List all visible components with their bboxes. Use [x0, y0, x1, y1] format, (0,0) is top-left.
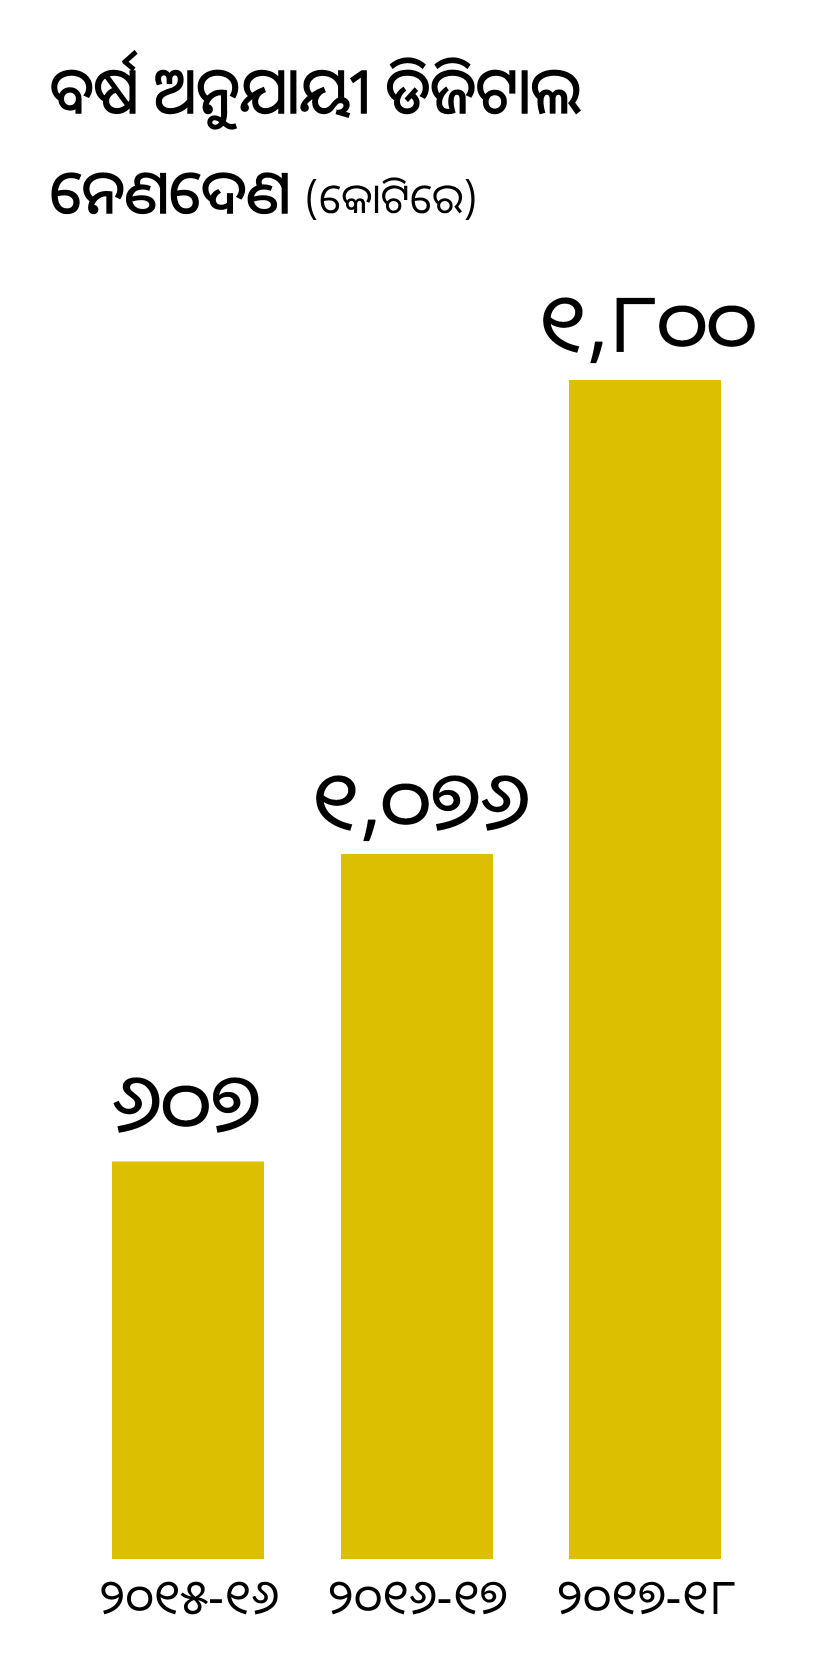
- bar: 2017-18: [537, 264, 757, 1629]
- value 1,076: ୧,୦୭୬: [310, 742, 530, 854]
- bar: 2015-16: [98, 1044, 279, 1629]
- title line 2 with unit: ନେଣଦେଣ (କୋଟିରେ): [50, 149, 478, 231]
- value 607: ୬୦୭: [112, 1044, 260, 1156]
- year label 2015-16: ୨୦୧୫-୧୬: [98, 1563, 279, 1629]
- year label 2016-17: ୨୦୧୬-୧୭: [327, 1563, 507, 1629]
- title: [50, 45, 581, 231]
- title line 1: ବର୍ଷ ଅନୁଯାୟୀ ଡିଜିଟାଲ: [50, 45, 581, 132]
- bar: 2016-17: [310, 742, 530, 1629]
- year label 2017-18: ୨୦୧୭-୧୮: [556, 1563, 736, 1629]
- bar 2016-17 rectangle: [341, 854, 493, 1559]
- value 1,800: ୧,୮୦୦: [537, 264, 757, 376]
- bar 2017-18 rectangle: [569, 380, 721, 1559]
- bar 2015-16 rectangle: [112, 1162, 264, 1559]
- bar chart: [98, 264, 757, 1629]
